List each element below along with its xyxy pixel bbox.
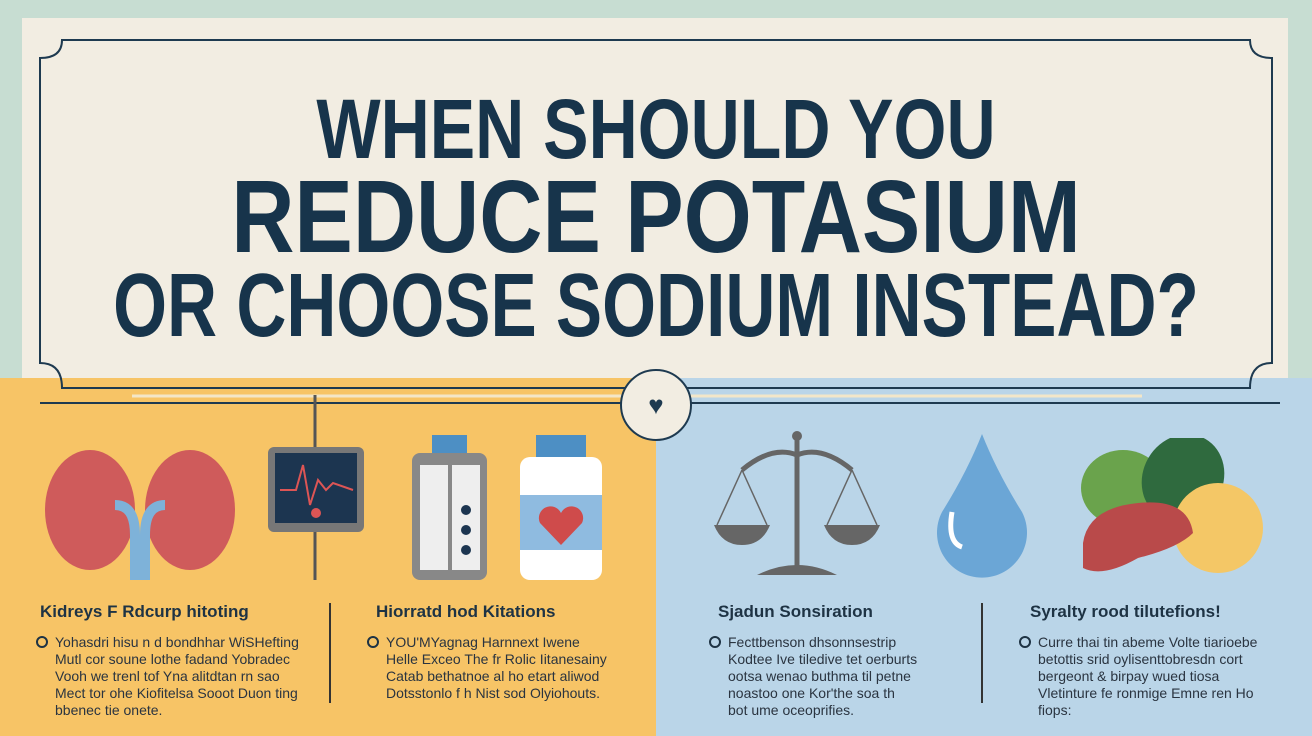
title banner bbox=[22, 18, 1288, 378]
text: column 2 bbox=[367, 602, 607, 701]
text: column 4: Syralty rood tilutefions! bbox=[1030, 602, 1221, 621]
text: column 4 bbox=[1019, 602, 1257, 718]
icon: monitor bbox=[268, 395, 364, 580]
text: column 1 bbox=[36, 602, 299, 718]
icon: scale bbox=[714, 431, 880, 575]
title: OR CHOOSE SODIUM INSTEAD? bbox=[113, 256, 1199, 356]
icon: heart circle bbox=[620, 369, 692, 441]
text: column 3: Sjadun Sonsiration bbox=[718, 602, 873, 621]
panel: right blue bbox=[656, 378, 1312, 736]
text: column 2: YOU'MYagnag Harnnext Iwene Helle Exceo The fr Rolic Iitanesainy Catab bethatnoe al ho etart aliwod Dotsstonlo f h Nist sod Olyiohouts. bbox=[386, 634, 607, 701]
text: column 3 bbox=[709, 602, 917, 718]
text: column 1: Yohasdri hisu n d bondhhar WiSHefting Mutl cor soune lothe fadand Yobradec Vooh we trenl tof Yna alitdtan rn sao Mect tor ohe Kiofitelsa Sooot Duon ting bbenec tie onete. bbox=[55, 634, 299, 718]
divider bbox=[329, 603, 331, 703]
panel: left yellow bbox=[0, 378, 656, 736]
divider bbox=[981, 603, 983, 703]
title: WHEN SHOULD YOU bbox=[316, 82, 996, 176]
icon: kidneys bbox=[45, 450, 235, 580]
icon: food bbox=[1081, 438, 1263, 573]
icon: device bbox=[412, 435, 487, 580]
icon: pill bottle bbox=[520, 435, 602, 580]
icon: heart circle: ♥ bbox=[648, 390, 664, 420]
text: column 1: Kidreys F Rdcurp hitoting bbox=[40, 602, 249, 621]
title bbox=[113, 82, 1199, 356]
text: column 3: Fecttbenson dhsonnsestrip Kodtee Ive tiledive tet oerburts ootsa wenao buthma til petne noastoo one Kor'the soa th bot ume oceoprifies. bbox=[728, 634, 917, 718]
title: REDUCE POTASIUM bbox=[231, 159, 1081, 274]
icon: water drop bbox=[937, 434, 1027, 578]
text: column 4: Curre thai tin abeme Volte tiarioebe betottis srid oylisenttobresdn cort bergeont & birpay wued tiosa Vletinture fe ronmige Emne ren Ho fiops: bbox=[1038, 634, 1257, 718]
text: column 2: Hiorratd hod Kitations bbox=[376, 602, 555, 621]
